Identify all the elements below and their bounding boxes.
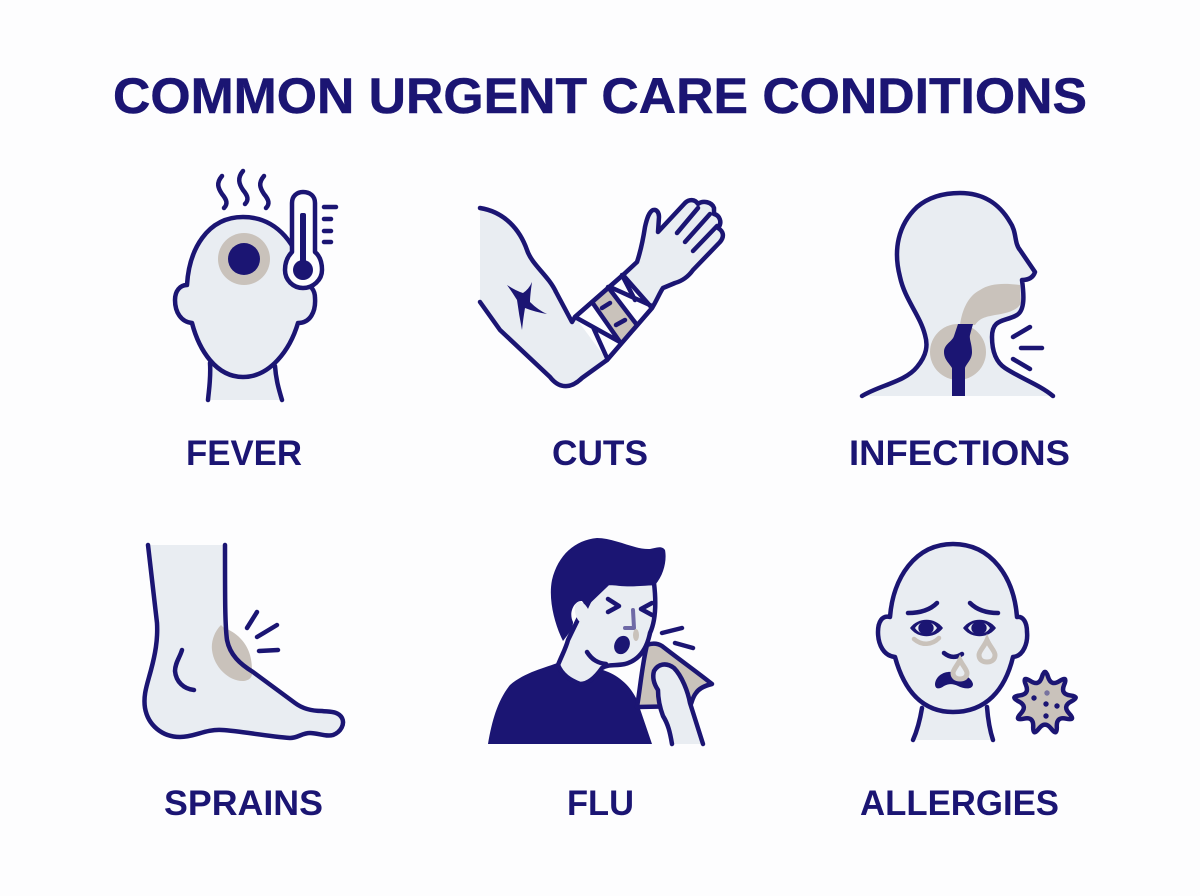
eyebrows <box>908 603 998 613</box>
throat airway <box>944 324 973 396</box>
thermometer <box>285 192 322 288</box>
hair <box>551 538 666 641</box>
panel: sprains <box>144 545 343 823</box>
icon: person sneezing into tissue <box>488 538 712 744</box>
label: infections: INFECTIONS <box>849 434 1070 473</box>
neck and face <box>558 583 655 684</box>
jaw line <box>587 652 606 664</box>
icon: arm with cut and bandage <box>480 200 723 386</box>
nose <box>944 653 962 657</box>
label: cuts: CUTS <box>552 434 648 473</box>
pain rays <box>1013 327 1042 369</box>
ear <box>575 602 588 623</box>
tears <box>953 640 995 679</box>
label: allergies: ALLERGIES <box>860 784 1059 823</box>
ankle bone line <box>175 650 194 690</box>
mouth <box>935 672 973 688</box>
mouth <box>611 633 633 657</box>
under-eye puffiness <box>914 638 939 644</box>
eyes <box>608 599 652 615</box>
icon: fever head with thermometer <box>175 171 336 400</box>
torso <box>488 662 652 744</box>
hand <box>653 664 703 744</box>
swelling <box>212 625 252 681</box>
allergen particle <box>1014 672 1076 732</box>
inflamed area <box>930 284 1021 380</box>
icon: head profile with inflamed throat <box>862 193 1053 396</box>
label: fever: FEVER <box>186 434 302 473</box>
panel: infections <box>849 193 1070 473</box>
panel: allergies <box>860 544 1076 823</box>
pain rays <box>247 612 278 651</box>
nose drip <box>633 629 639 641</box>
label: flu: FLU <box>567 784 634 823</box>
warm spot on forehead <box>218 233 270 285</box>
icon: foot with swollen ankle <box>144 545 343 738</box>
icon: teary face with allergen <box>878 544 1076 740</box>
nose <box>625 610 634 628</box>
panel: cuts <box>480 200 723 473</box>
label: sprains: SPRAINS <box>164 784 323 823</box>
cut mark <box>507 282 547 330</box>
panel: fever <box>175 171 336 473</box>
heat waves <box>218 171 268 208</box>
title: COMMON URGENT CARE CONDITIONS <box>113 67 1087 124</box>
sneeze lines <box>662 628 693 648</box>
bandage <box>575 275 652 360</box>
panel: flu <box>488 538 712 823</box>
finger lines <box>677 208 717 251</box>
temperature ticks <box>324 207 336 242</box>
eyes <box>910 620 996 636</box>
tissue <box>637 644 712 707</box>
